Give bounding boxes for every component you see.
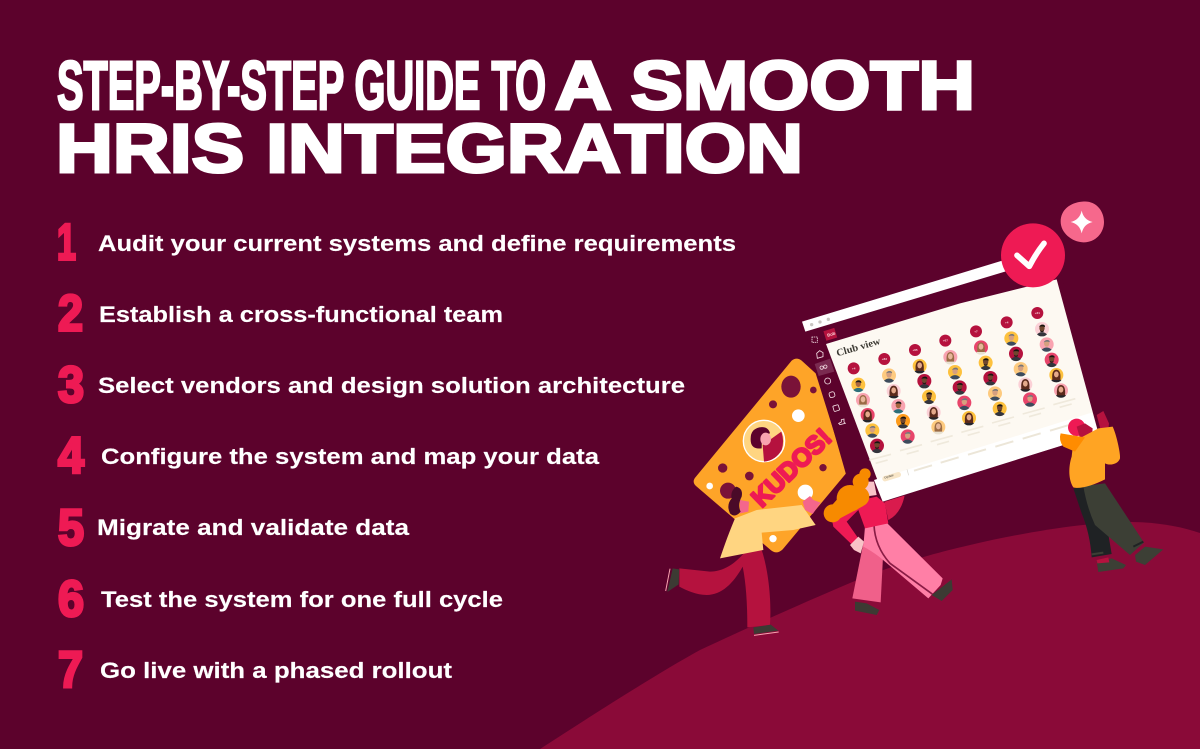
step 5 <box>58 499 410 556</box>
avatar columns <box>851 322 1068 453</box>
screen frame <box>805 255 1100 502</box>
step 3: 3 <box>58 356 84 413</box>
title line 1: condensed: STEP-BY-STEP GUIDE TO <box>57 47 546 124</box>
illustration: dashboard screen: +4 <box>1005 320 1009 324</box>
content panel <box>826 279 1099 500</box>
icon: sparkle badge <box>1061 201 1104 242</box>
step 7: Go live with a phased rollout <box>100 658 453 683</box>
placeholder lines <box>869 399 1075 463</box>
bob logo: Bob <box>826 331 836 338</box>
illustration: dashboard screen: +4 <box>852 366 856 370</box>
count badges <box>848 307 1043 374</box>
hill <box>540 522 1200 749</box>
update pill: Update <box>884 473 894 480</box>
illustration: dashboard screen: +7 <box>974 329 978 333</box>
step 4: Configure the system and map your data <box>101 444 600 469</box>
step 6: 6 <box>58 570 84 627</box>
step 6 <box>58 570 503 627</box>
illustration: dashboard screen: +21 <box>1035 311 1040 315</box>
person: man in orange hoodie <box>1060 411 1163 572</box>
step 2: 2 <box>58 284 83 342</box>
step 1: Audit your current systems and define requirements <box>98 231 736 256</box>
panel heading: Club view <box>835 336 883 359</box>
title <box>56 47 975 187</box>
illustration: dashboard screen <box>802 245 1100 502</box>
step 7: 7 <box>58 641 83 698</box>
icon: check badge <box>1001 223 1065 287</box>
step 3: Select vendors and design solution architecture <box>98 373 685 398</box>
step 1 <box>57 214 736 270</box>
person: woman with orange hair <box>824 468 953 615</box>
update pill <box>882 471 902 482</box>
step 4: 4 <box>58 426 85 484</box>
title line 1: wide: A SMOOTH <box>555 47 975 124</box>
step 6: Test the system for one full cycle <box>101 587 503 612</box>
illustration: dashboard screen: +67 <box>943 339 948 343</box>
illustration: kudos card <box>694 359 847 552</box>
illustration: person with red hair, back layer <box>883 493 905 520</box>
sidebar icons <box>812 337 845 425</box>
bob logo <box>823 328 837 341</box>
steps list <box>57 214 736 698</box>
illustration: dashboard screen: +83 <box>882 357 887 361</box>
illustration: kudos card: KUDOS! <box>746 424 837 513</box>
step 3 <box>58 356 685 413</box>
illustration: dashboard screen: +65 <box>912 348 918 352</box>
person: woman in cream sweater <box>666 483 821 635</box>
step 1: 1 <box>57 214 76 270</box>
step 5: Migrate and validate data <box>97 515 410 540</box>
title line 2: HRIS INTEGRATION <box>56 110 803 187</box>
step 4 <box>58 426 600 484</box>
step 5: 5 <box>58 499 84 556</box>
browser bar <box>802 245 1057 332</box>
step 2: Establish a cross-functional team <box>99 302 503 327</box>
step 7 <box>58 641 453 698</box>
footer strip <box>874 413 1099 502</box>
step 2 <box>58 284 503 342</box>
